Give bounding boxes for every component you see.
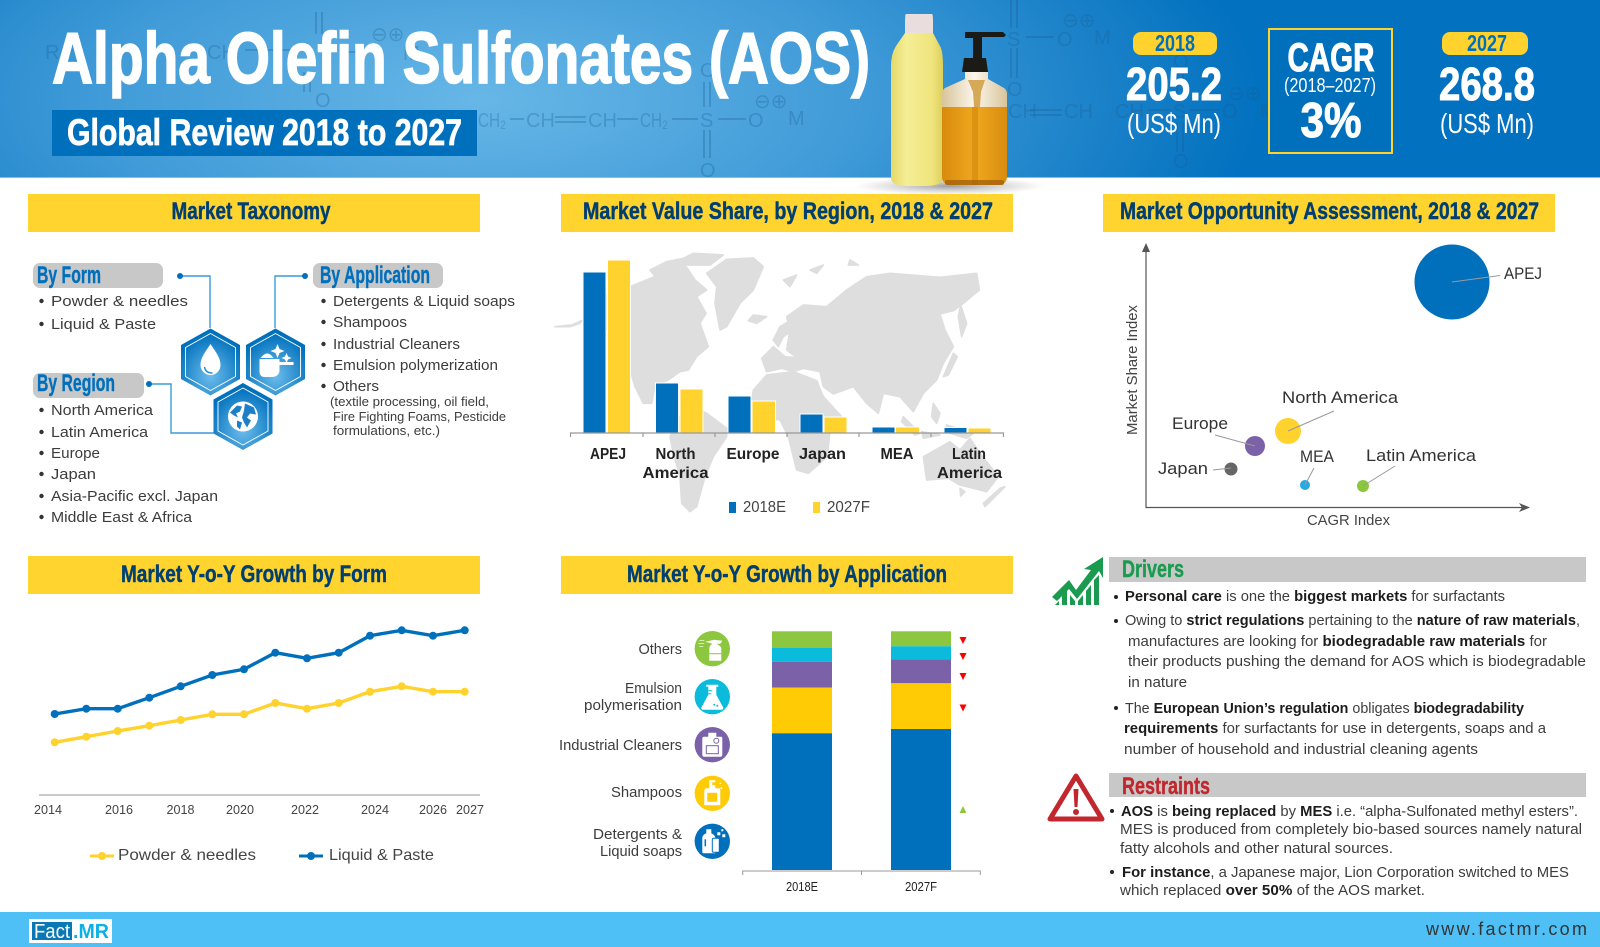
panel: market value share by region — [555, 194, 1013, 516]
drivers text: The European Union’s regulation obligates biodegradability — [1125, 700, 1525, 717]
bar chart: regional value share: Latin — [952, 446, 986, 463]
bubble chart: opportunity: MEA — [1300, 447, 1335, 466]
by application list: Others — [333, 378, 379, 395]
stacked bar chart: application share: 2018E — [786, 879, 818, 894]
heading: market value share — [561, 194, 1013, 232]
stat: CAGR box: 3% — [1300, 94, 1362, 148]
chemical formula watermark: O — [1007, 79, 1023, 101]
chemical formula watermark: O — [1057, 29, 1073, 51]
application labels and icons: Emulsion — [625, 680, 682, 697]
logo: Fact.MR — [29, 919, 112, 943]
by application list — [313, 262, 515, 438]
stacked bar chart: application share — [743, 631, 980, 894]
stat: CAGR box: CAGR — [1288, 36, 1375, 80]
by application list: By Application — [320, 262, 430, 289]
chemical formula watermark: O — [1222, 101, 1238, 123]
icon: growth chart arrow — [1052, 557, 1103, 605]
logo: Fact.MR: Fact — [34, 921, 70, 943]
application labels and icons: Liquid soaps — [600, 843, 682, 860]
panel: growth by application — [559, 556, 1013, 894]
heading: restraints: Restraints — [1122, 773, 1210, 800]
stat: 2018 value: 2018 — [1155, 30, 1195, 56]
header banner — [0, 0, 1600, 195]
drivers text: in nature — [1128, 674, 1187, 691]
bubble chart: opportunity: Japan — [1158, 459, 1208, 478]
chemical formula watermark: M — [1260, 101, 1277, 123]
icon: flask — [695, 679, 730, 714]
stacked bar chart: application share: 2027F — [905, 879, 937, 894]
chemical formula watermark: O — [700, 160, 716, 182]
heading: drivers: Drivers — [1122, 556, 1184, 583]
restraints text: which replaced over 50% of the AOS market. — [1119, 882, 1425, 899]
heading: restraints — [1109, 773, 1586, 800]
panel: growth by form — [28, 556, 484, 864]
drivers text: Personal care is one the biggest markets for surfactants — [1125, 588, 1505, 605]
stat: 2018 value: 205.2 — [1126, 58, 1222, 110]
by application list: formulations, etc.) — [333, 423, 440, 438]
footer bar — [0, 912, 1600, 947]
panel: drivers — [1052, 556, 1586, 758]
icon: cleaner bottle — [695, 727, 730, 762]
panel: restraints — [1050, 773, 1586, 899]
line chart: growth by form: 2020 — [226, 802, 254, 817]
chemical formula watermark: S — [1173, 101, 1186, 123]
bubble chart: opportunity: Latin America — [1366, 446, 1477, 465]
by region list: North America — [51, 402, 154, 419]
legend: form series — [90, 847, 434, 864]
chemical formula watermark: CH — [1008, 101, 1037, 123]
by form list: Powder & needles — [51, 293, 188, 310]
line chart: growth by form — [34, 626, 484, 817]
title: Alpha Olefin Sulfonates (AOS) — [52, 19, 870, 99]
chemical formula watermark: CH₂ — [640, 110, 668, 132]
line chart: growth by form: 2016 — [105, 802, 133, 817]
by application list: Industrial Cleaners — [333, 336, 460, 353]
stat: 2027 value: (US$ Mn) — [1440, 108, 1534, 139]
application labels and icons: Others — [638, 641, 682, 658]
restraints text: fatty alcohols and other natural sources. — [1120, 840, 1393, 857]
drivers text: their products pushing the demand for AOS which is biodegradable — [1128, 653, 1586, 670]
heading: growth by application — [561, 556, 1013, 594]
bubble chart: opportunity: Market Share Index — [1125, 304, 1141, 435]
by region list: Europe — [51, 445, 100, 462]
by form list: By Form — [37, 262, 101, 289]
icon: water drop hexagon — [181, 328, 240, 396]
panel: market taxonomy — [28, 194, 515, 526]
chemical formula watermark: R — [45, 42, 59, 64]
legend: 2018E 2027F: 2018E — [743, 499, 786, 516]
bar chart: regional value share: APEJ — [590, 446, 626, 463]
by region list: Japan — [51, 466, 96, 483]
website url: www.factmr.com — [1425, 919, 1587, 939]
application labels and icons: Detergents & — [593, 826, 682, 843]
line chart: growth by form: 2022 — [291, 802, 319, 817]
chemical formula watermark: O — [315, 90, 331, 112]
by form list: Liquid & Paste — [51, 316, 156, 333]
heading: growth by application: Market Y-o-Y Growth by Application — [627, 561, 947, 588]
restraints text: AOS is being replaced by MES i.e. “alpha-Sulfonated methyl esters”. — [1121, 803, 1578, 820]
stat: CAGR box: (2018–2027) — [1284, 75, 1376, 97]
by region list: Asia-Pacific excl. Japan — [51, 488, 218, 505]
heading: market taxonomy — [28, 194, 480, 232]
restraints text: For instance, a Japanese major, Lion Corporation switched to MES — [1122, 864, 1569, 881]
bubble chart: opportunity: Europe — [1172, 414, 1228, 433]
heading: market value share: Market Value Share, by Region, 2018 & 2027 — [583, 198, 993, 225]
application labels and icons: polymerisation — [584, 697, 682, 714]
stat: 2027 value: 2027 — [1467, 30, 1507, 56]
drivers text: number of household and industrial cleaning agents — [1124, 741, 1478, 758]
logo: Fact.MR: .MR — [73, 921, 110, 943]
chemical formula watermark: O — [1173, 51, 1189, 73]
application labels and icons: Industrial Cleaners — [559, 737, 682, 754]
heading: market taxonomy: Market Taxonomy — [172, 198, 331, 225]
bubble chart: opportunity — [1125, 243, 1542, 529]
bubble chart: opportunity: North America — [1282, 388, 1399, 407]
legend: 2018E 2027F: 2027F — [827, 499, 870, 516]
bar chart: regional value share: Europe — [726, 446, 780, 463]
by region list: Latin America — [51, 424, 149, 441]
icon: detergent scoop hexagon — [246, 328, 305, 396]
restraints text — [1110, 803, 1582, 899]
by region list: By Region — [37, 370, 115, 397]
chemical formula watermark: ⊖⊕ — [1062, 10, 1096, 32]
chemical formula watermark: ⊖⊕ — [1228, 83, 1262, 105]
heading: market opportunity — [1103, 194, 1555, 232]
icon: shampoo bottle — [695, 776, 730, 811]
stat: CAGR box — [1269, 29, 1392, 153]
icon: detergent bottles — [695, 824, 730, 859]
by form list — [33, 262, 188, 333]
chemical formula watermark: M — [1094, 27, 1111, 49]
chemical formula watermark: CH — [207, 42, 236, 64]
bar chart: regional value share: America — [937, 465, 1002, 482]
chemical formula watermark: M — [788, 108, 805, 130]
stat: 2018 value: (US$ Mn) — [1127, 108, 1221, 139]
icon: fire extinguisher — [695, 631, 730, 666]
heading: growth by form — [28, 556, 480, 594]
drivers text — [1114, 588, 1586, 758]
line chart: growth by form: 2027 — [456, 802, 484, 817]
drivers text: requirements for surfactants for use in detergents, soaps and a — [1124, 720, 1547, 737]
chemical formula watermark: ⊖⊕ — [371, 24, 405, 46]
chemical formula watermark — [45, 0, 1277, 182]
icon: globe hexagon — [214, 383, 272, 450]
chemical formula watermark: S — [1007, 29, 1020, 51]
world map background — [555, 253, 1005, 512]
line chart: growth by form: 2024 — [361, 802, 389, 817]
panel: market opportunity assessment — [1103, 194, 1555, 529]
by region list: Middle East & Africa — [51, 509, 193, 526]
application labels and icons: Shampoos — [611, 784, 682, 801]
chemical formula watermark: S — [700, 110, 713, 132]
stat: 2027 value: 268.8 — [1439, 58, 1535, 110]
stat: 2018 value — [1126, 30, 1222, 139]
chemical formula watermark: ⊖⊕ — [754, 91, 788, 113]
icon: warning triangle — [1050, 776, 1102, 819]
chemical formula watermark: O — [1173, 151, 1189, 173]
chemical formula watermark: O — [700, 60, 716, 82]
application labels and icons — [559, 631, 730, 860]
bar chart: regional value share: America — [642, 465, 709, 482]
drivers text: manufactures are looking for biodegradable raw materials for — [1128, 633, 1547, 650]
legend: form series: Powder & needles — [118, 847, 256, 864]
by application list: Fire Fighting Foams, Pesticide — [333, 409, 506, 424]
bar chart: regional value share — [570, 260, 1004, 482]
by region list — [33, 370, 218, 526]
heading: drivers — [1109, 556, 1586, 583]
chemical formula watermark: M — [403, 43, 420, 65]
line chart: growth by form: 2026 — [419, 802, 447, 817]
bar chart: regional value share: Japan — [799, 446, 846, 463]
chemical formula watermark: CH₂ — [478, 110, 506, 132]
drivers text: Owing to strict regulations pertaining to the nature of raw materials, — [1125, 612, 1580, 629]
stat: 2027 value — [1439, 30, 1535, 139]
subtitle: Global Review 2018 to 2027 — [67, 112, 462, 153]
by application list: Shampoos — [333, 314, 407, 331]
by application list: (textile processing, oil field, — [330, 394, 489, 409]
legend: form series: Liquid & Paste — [329, 847, 434, 864]
legend: 2018E 2027F — [729, 499, 870, 516]
chemical formula watermark: CH — [526, 110, 555, 132]
by application list: Detergents & Liquid soaps — [333, 293, 515, 310]
chemical formula watermark: O — [748, 110, 764, 132]
line chart: growth by form: 2014 — [34, 802, 62, 817]
bubble chart: opportunity: APEJ — [1504, 264, 1542, 283]
chemical formula watermark: CH — [588, 110, 617, 132]
restraints text: MES is produced from completely bio-based sources namely natural — [1120, 821, 1582, 838]
heading: growth by form: Market Y-o-Y Growth by Form — [121, 561, 387, 588]
chemical formula watermark: CH — [1115, 101, 1144, 123]
bubble chart: opportunity: CAGR Index — [1307, 513, 1391, 529]
chemical formula watermark: CH — [1064, 101, 1093, 123]
bar chart: regional value share: MEA — [880, 446, 914, 463]
by application list: Emulsion polymerization — [333, 357, 498, 374]
image: product bottles — [855, 14, 1045, 195]
bar chart: regional value share: North — [656, 446, 696, 463]
line chart: growth by form: 2018 — [166, 802, 194, 817]
